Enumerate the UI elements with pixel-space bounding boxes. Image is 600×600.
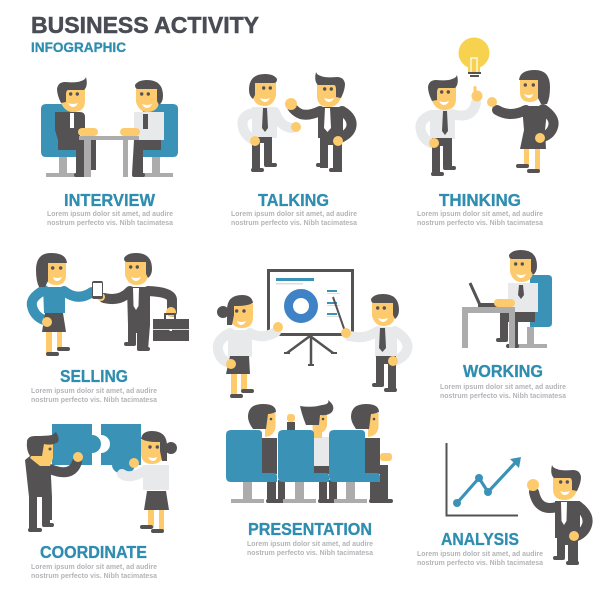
panel: presentation: [226, 400, 393, 557]
illustration: thinking: [420, 70, 554, 176]
title: BUSINESS ACTIVITY: [31, 12, 259, 38]
panel: coordinate: [25, 424, 177, 580]
heading: PRESENTATION: [248, 519, 372, 539]
body text: Lorem ipsum dolor sit amet, ad audire: [247, 539, 373, 548]
body text: nostrum perfecto vis. Nibh tacimatesa: [417, 218, 544, 227]
illustration: man with pointer: [333, 294, 408, 392]
body text: nostrum perfecto vis. Nibh tacimatesa: [247, 548, 374, 557]
body text: [417, 549, 544, 567]
body text: nostrum perfecto vis. Nibh tacimatesa: [31, 571, 158, 580]
body text: nostrum perfecto vis. Nibh tacimatesa: [231, 218, 358, 227]
body text: nostrum perfecto vis. Nibh tacimatesa: [31, 395, 158, 404]
icon: whiteboard with donut chart: [268, 270, 352, 366]
panel: analysis: [417, 443, 588, 567]
illustration: man with puzzle: [25, 432, 83, 532]
heading: ANALYSIS: [441, 529, 519, 549]
illustration: talking: [242, 72, 352, 172]
heading: TALKING: [258, 190, 329, 210]
body text: Lorem ipsum dolor sit amet, ad audire: [440, 382, 566, 391]
heading: WORKING: [463, 361, 543, 381]
icon: light bulb: [458, 38, 490, 77]
illustration: interview: [41, 77, 178, 177]
illustration: woman with puzzle: [122, 431, 177, 533]
body text: Lorem ipsum dolor sit amet, ad audire: [231, 209, 357, 218]
illustration: selling: [32, 253, 189, 356]
body text: [440, 382, 567, 400]
illustration: working: [462, 250, 552, 348]
icon: puzzle pieces: [52, 424, 141, 474]
body text: Lorem ipsum dolor sit amet, ad audire: [417, 209, 543, 218]
body text: [31, 562, 158, 580]
icon: briefcase: [153, 314, 189, 341]
illustration: woman presenting: [217, 295, 283, 398]
body text: [231, 209, 358, 227]
body text: [417, 209, 544, 227]
body text: [47, 209, 174, 227]
panel: interview: [41, 77, 178, 227]
body text: Lorem ipsum dolor sit amet, ad audire: [417, 549, 543, 558]
body text: Lorem ipsum dolor sit amet, ad audire: [31, 562, 157, 571]
panel: whiteboard presentation scene: [217, 270, 408, 398]
panel: working: [440, 250, 567, 400]
body text: Lorem ipsum dolor sit amet, ad audire: [31, 386, 157, 395]
panel: thinking: [417, 38, 554, 227]
body text: [247, 539, 374, 557]
icon: phone: [92, 281, 103, 299]
illustration: analyst: [527, 465, 588, 565]
heading: INTERVIEW: [64, 190, 155, 210]
heading: COORDINATE: [40, 542, 147, 562]
panel: talking: [231, 72, 358, 227]
body text: nostrum perfecto vis. Nibh tacimatesa: [47, 218, 174, 227]
body text: [31, 386, 158, 404]
heading: SELLING: [60, 366, 128, 386]
illustration: audience in chairs: [226, 400, 393, 503]
heading: THINKING: [439, 190, 521, 210]
body text: nostrum perfecto vis. Nibh tacimatesa: [440, 391, 567, 400]
body text: nostrum perfecto vis. Nibh tacimatesa: [417, 558, 544, 567]
body text: Lorem ipsum dolor sit amet, ad audire: [47, 209, 173, 218]
panel: selling: [31, 253, 189, 404]
subtitle: INFOGRAPHIC: [31, 39, 126, 55]
chart: rising line graph: [446, 443, 521, 516]
